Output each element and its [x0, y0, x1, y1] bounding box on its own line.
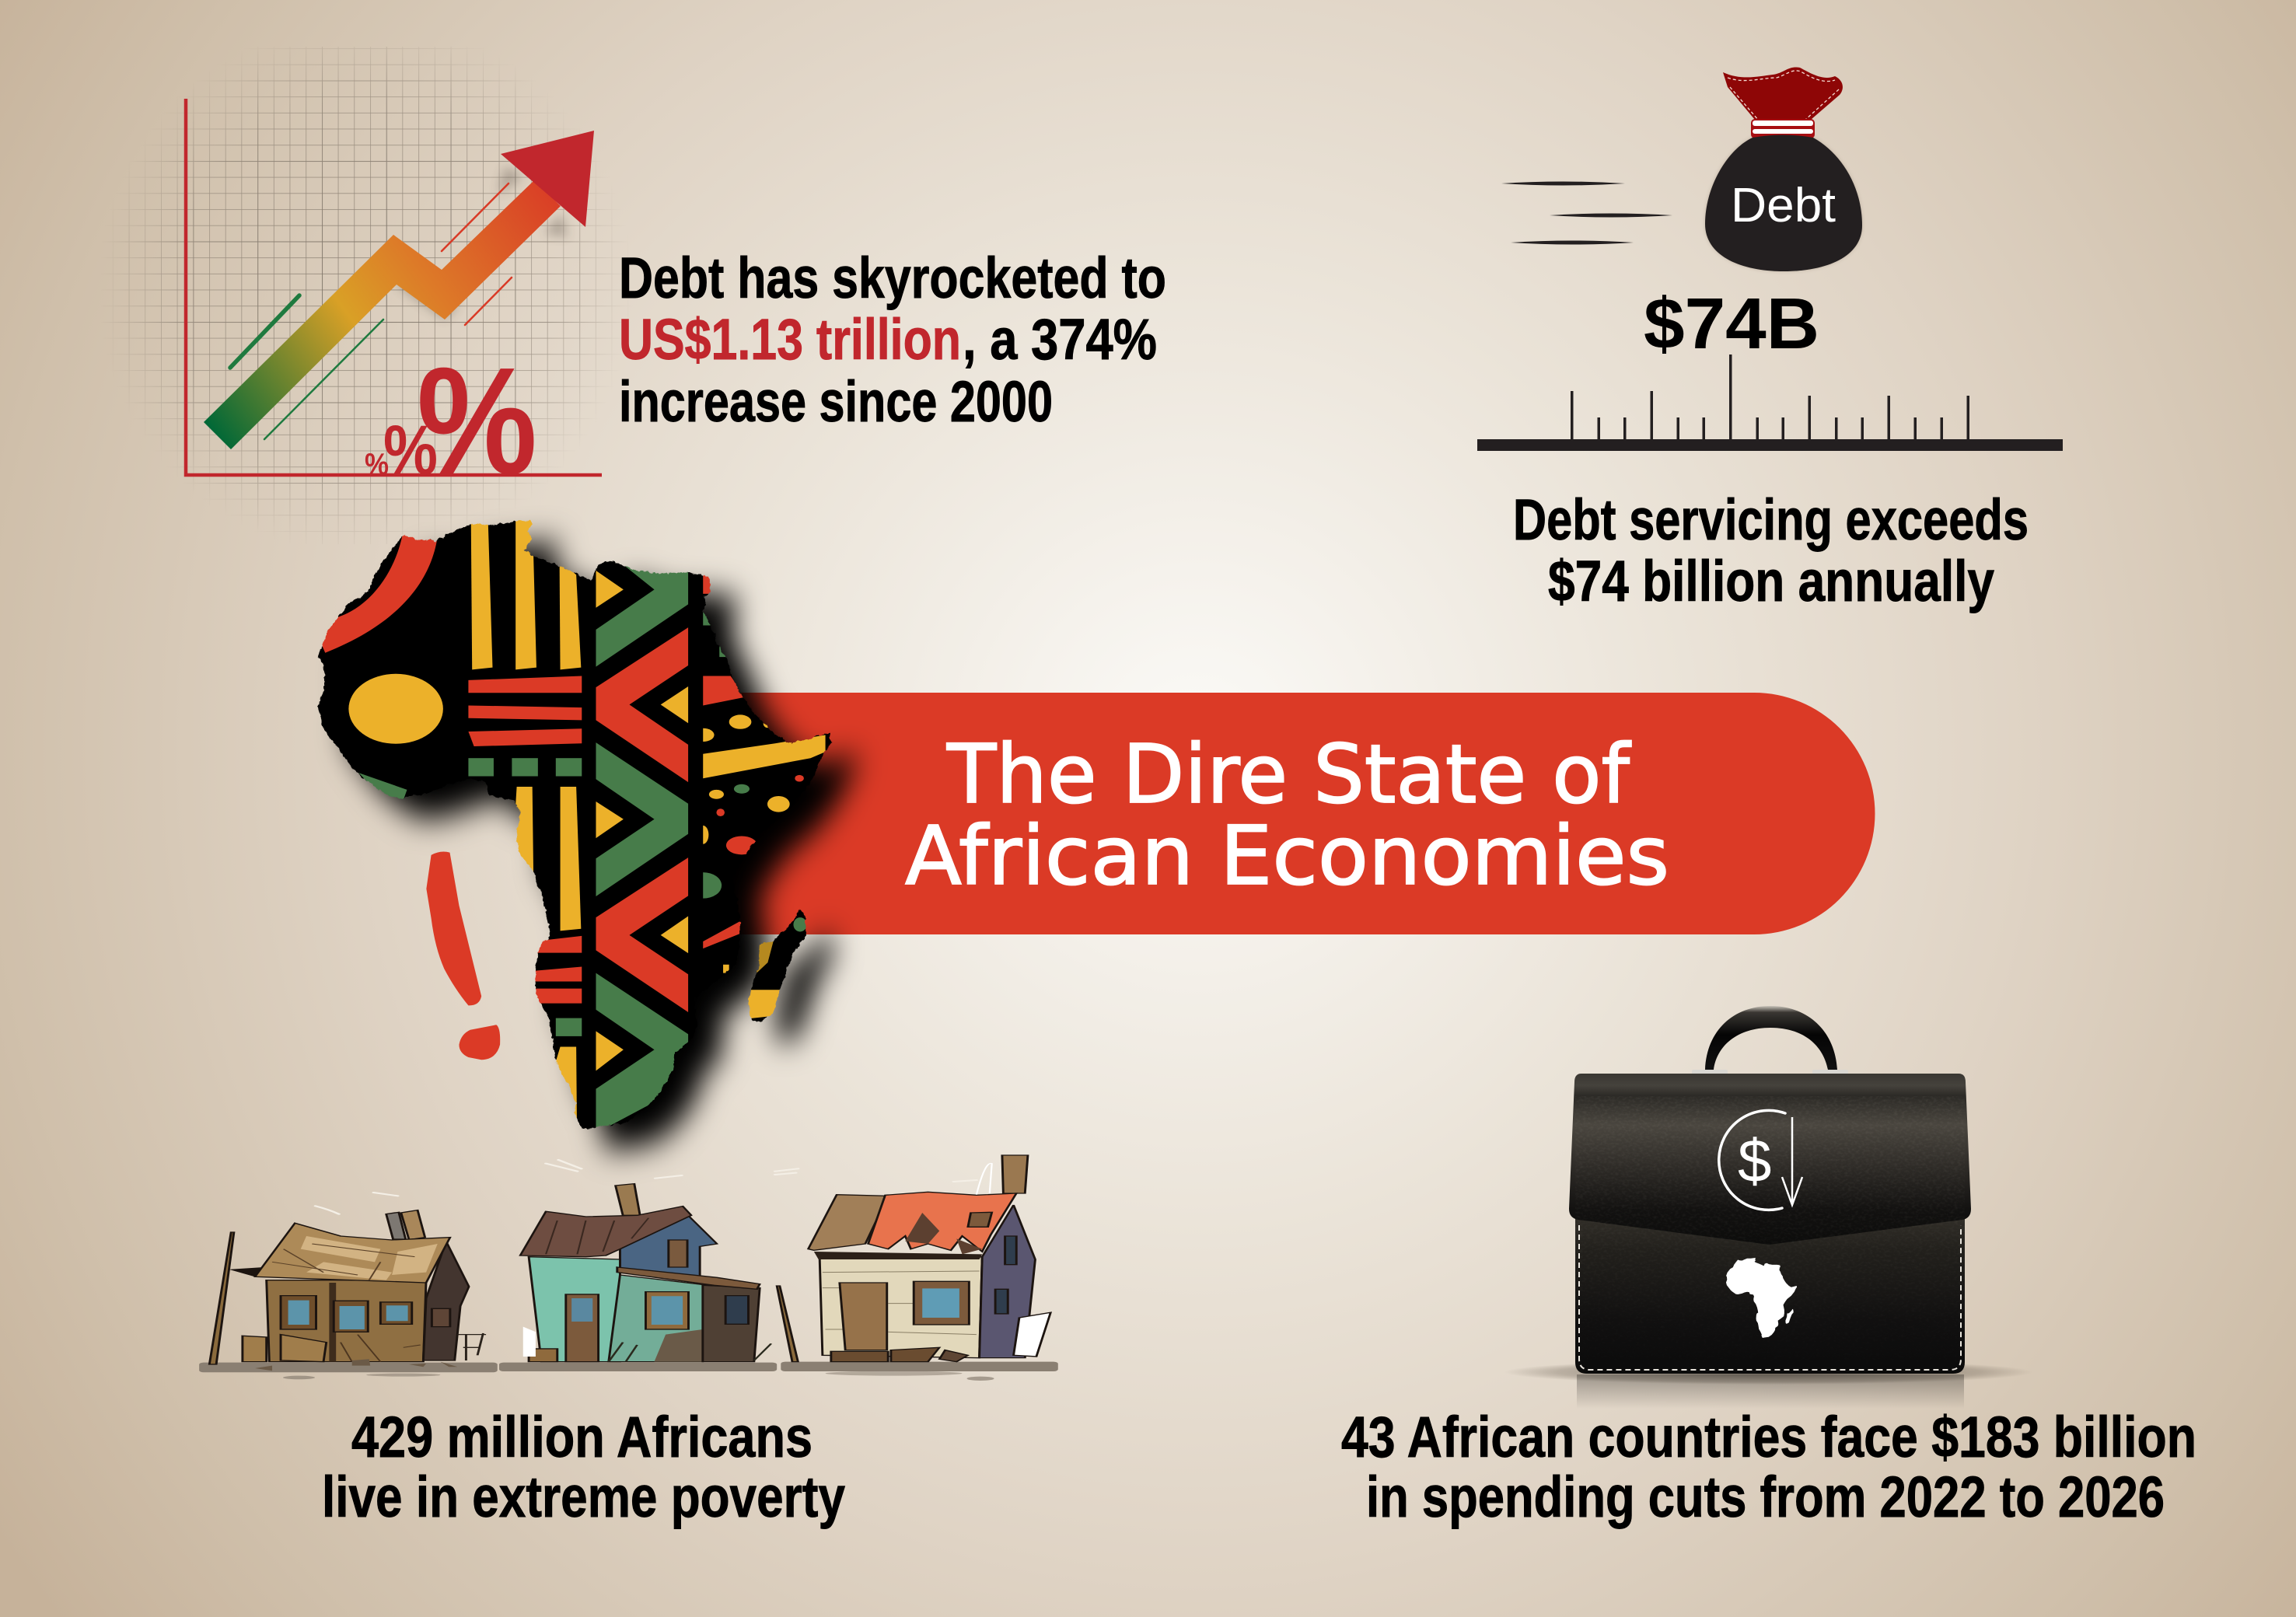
ruler scale: [1477, 354, 2063, 451]
percent symbols: [365, 336, 537, 506]
rising arrow shadow: [397, 166, 568, 320]
panel: poverty houses: [199, 1155, 1058, 1529]
exclamation mark: [426, 852, 500, 1060]
text: debt skyrocketed: increase since 2000: [619, 369, 1053, 434]
icon: debt bag: Debt: [1731, 179, 1836, 232]
trend dashes: [230, 183, 512, 439]
motion lines: [1501, 182, 1672, 244]
floor shadow: [1504, 1360, 2033, 1385]
text: debt skyrocketed: US$1.13 trillion: [619, 307, 961, 372]
title: African Economies: [905, 808, 1669, 903]
icon: briefcase: [1504, 1006, 2033, 1409]
panel: debt servicing: [1477, 67, 2063, 613]
rising arrow: [204, 131, 594, 449]
map of Africa: [295, 505, 858, 1158]
white Africa icon: [1726, 1258, 1797, 1338]
ground: [199, 1362, 1058, 1381]
dollar down icon: $: [1738, 1126, 1771, 1195]
handle: [1705, 1006, 1837, 1070]
percent symbols: %: [417, 336, 537, 506]
case body: [1575, 1197, 1965, 1374]
flap: [1569, 1074, 1971, 1245]
text: debt skyrocketed: Debt has skyrocketed to: [619, 246, 1166, 310]
text: debt servicing: $74 billion annually: [1548, 549, 1994, 613]
illustration: three run-down houses: [199, 1155, 1058, 1381]
text: extreme poverty: 429 million Africans: [351, 1405, 813, 1469]
value: $74B: $74B: [1644, 283, 1819, 364]
chart axes: [186, 99, 602, 475]
title: The Dire State of: [946, 727, 1631, 822]
percent symbols: %: [365, 448, 389, 481]
house 1: [209, 1210, 486, 1371]
text: spending cuts: [1341, 1405, 2196, 1529]
panel: spending cuts: [1341, 1006, 2196, 1529]
Madagascar: [748, 910, 806, 1023]
dollar down icon: [1719, 1110, 1802, 1210]
text: debt servicing: Debt servicing exceeds: [1513, 487, 2029, 552]
chart grid: [101, 47, 645, 544]
percent symbols: %: [383, 412, 438, 490]
house 2: [520, 1184, 771, 1362]
title banner: [700, 693, 1875, 934]
text: extreme poverty: [322, 1405, 845, 1529]
icon: debt bag: [1705, 67, 1862, 271]
title: [905, 727, 1669, 903]
map shadow: [344, 541, 858, 1151]
text: extreme poverty: live in extreme poverty: [322, 1465, 845, 1529]
panel: debt rising chart: [101, 47, 645, 544]
text: debt servicing: [1513, 487, 2029, 613]
mainland pattern: [317, 519, 832, 1130]
reflection: [1577, 1374, 1964, 1409]
leather texture: [1577, 1096, 1964, 1238]
text: debt skyrocketed: [619, 246, 1166, 434]
house 3: [777, 1155, 1050, 1362]
flying debris: [316, 1160, 977, 1214]
stitching: [1579, 1225, 1961, 1370]
handle clasps: [1692, 1070, 1848, 1074]
text: debt skyrocketed: , a 374%: [963, 307, 1157, 372]
